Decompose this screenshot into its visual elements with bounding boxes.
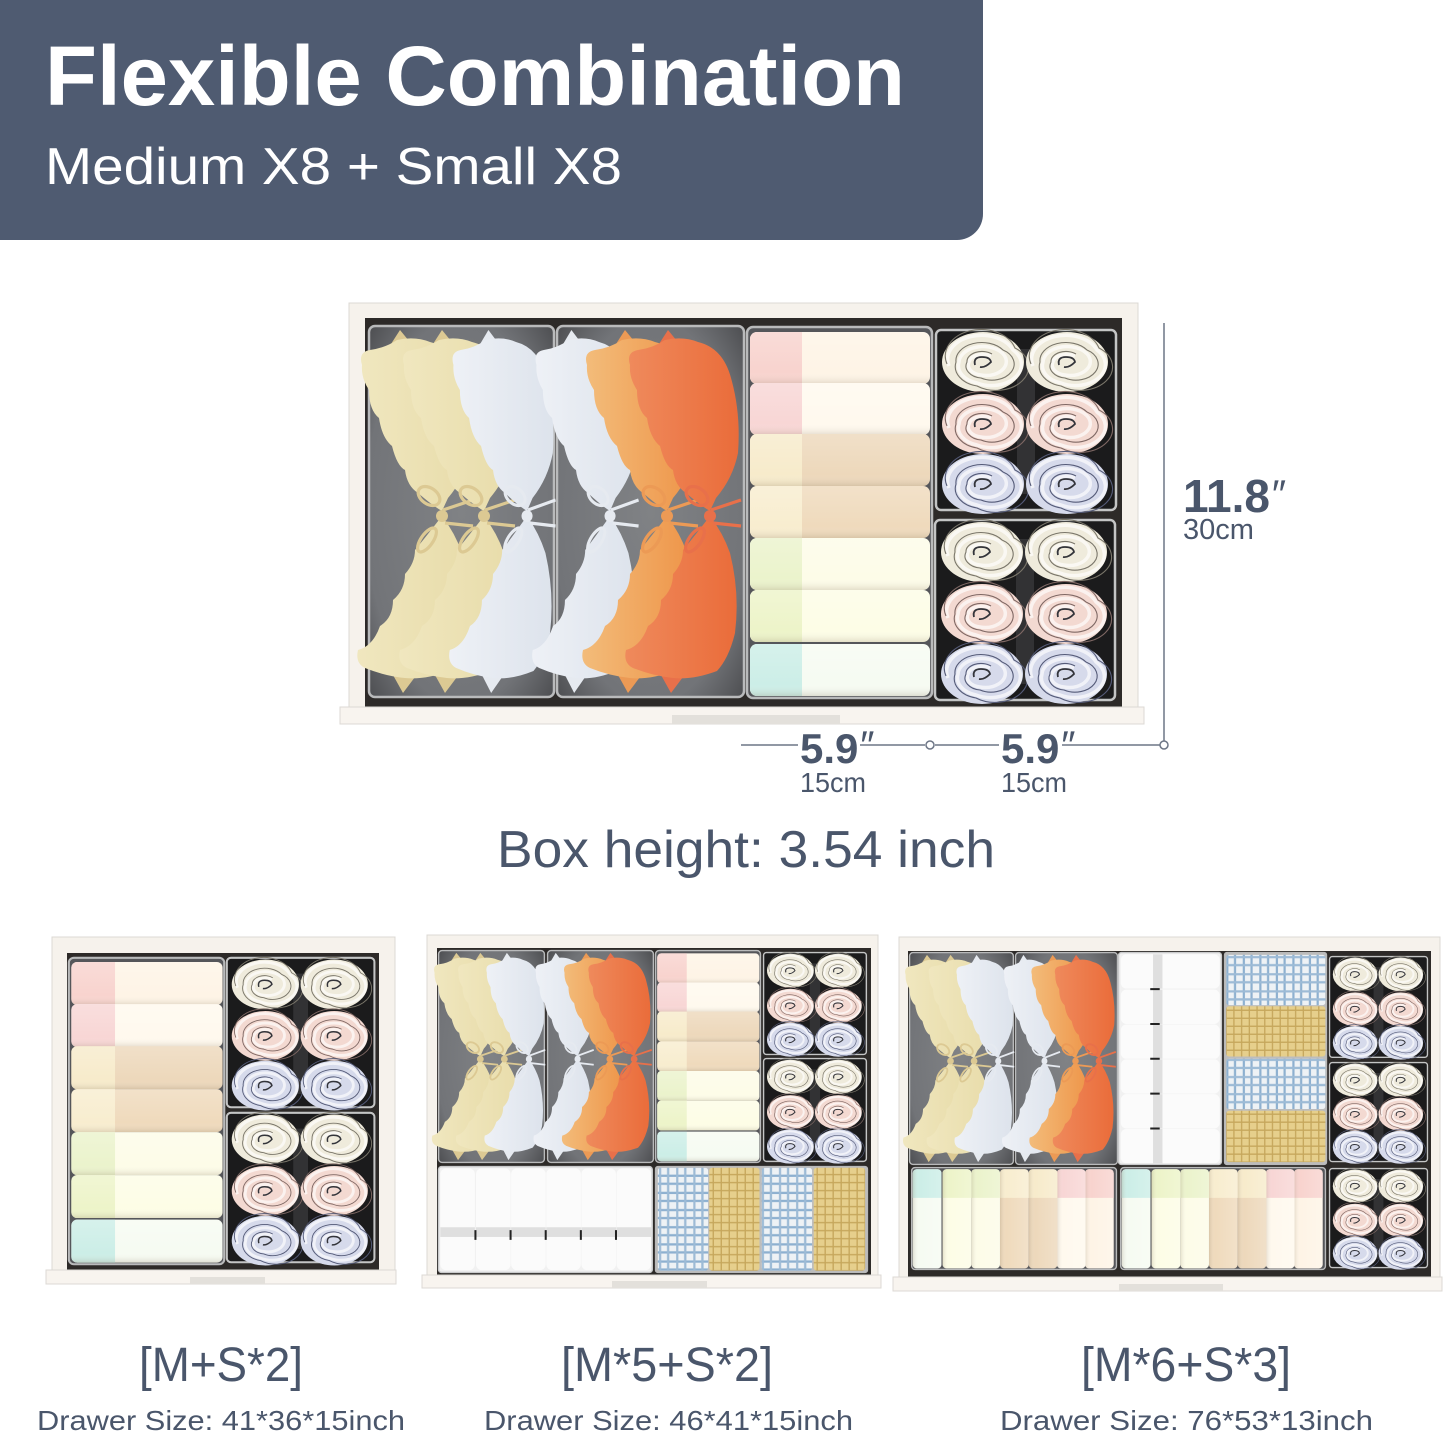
medium box: folded underwear (747, 327, 932, 698)
label: M*6+S*3 (1000, 1339, 1373, 1433)
dimension: width 5.9 inch right (935, 724, 1168, 798)
small box middle (1330, 1062, 1427, 1164)
vertical folded box 2 (1121, 1168, 1325, 1269)
medium box (69, 958, 224, 1264)
main drawer illustration (340, 303, 1144, 724)
drawer option: M*6+S*3 (893, 937, 1442, 1291)
label: M+S*2: [M+S*2] (139, 1339, 303, 1392)
small box top (1330, 956, 1427, 1060)
heading: Flexible Combination: Flexible Combination (45, 29, 905, 123)
dimension: width 5.9 inch left: 15cm (800, 767, 866, 798)
small box bottom (1330, 1168, 1427, 1270)
dimension: width 5.9 inch right: ″ (1059, 724, 1075, 768)
box height caption: Box height: 3.54 inch (497, 821, 995, 879)
label: M*5+S*2: [M*5+S*2] (561, 1339, 773, 1392)
small box bottom (227, 1112, 374, 1266)
dimension: height 11.8 inch: 11.8 (1183, 470, 1270, 522)
front rail (46, 1270, 396, 1284)
small box top (227, 957, 374, 1111)
dimension: width 5.9 inch left: ″ (858, 724, 874, 768)
bra box 2 (1002, 953, 1117, 1164)
drawer option: M*5+S*2 (422, 935, 881, 1288)
small box: rolled socks bottom (935, 520, 1115, 704)
plaid box (656, 1167, 867, 1272)
bra box 1 (903, 953, 1014, 1164)
dimension: width 5.9 inch left: 5.9 (800, 725, 858, 772)
dimension: height 11.8 inch: 30cm (1183, 514, 1254, 546)
towel box (439, 1167, 652, 1272)
white towels box (1119, 953, 1221, 1164)
front rail (422, 1275, 881, 1288)
small box top (764, 952, 866, 1057)
drawer option: M+S*2 (46, 937, 396, 1284)
drawer frame (349, 303, 1138, 723)
subheading: Medium X8 + Small X8: Medium X8 + Small X8 (45, 138, 622, 196)
title banner (0, 0, 983, 240)
vertical folded box 1 (912, 1168, 1116, 1269)
dimension: width 5.9 inch right: 15cm (1001, 767, 1067, 798)
folded box (656, 951, 760, 1162)
label: M+S*2 (37, 1339, 405, 1433)
small box: rolled socks top (936, 330, 1116, 514)
medium box: white and orange bras (532, 326, 744, 697)
dimension: width 5.9 inch left (741, 724, 934, 798)
dimension: width 5.9 inch right: 5.9 (1001, 725, 1059, 772)
front rail (893, 1277, 1442, 1291)
plaid box (1225, 953, 1326, 1164)
drawer front rail (340, 707, 1144, 724)
bra box 1 (432, 951, 545, 1162)
bra box 2 (533, 951, 653, 1162)
label: M*5+S*2 (484, 1339, 853, 1433)
dimension: height 11.8 inch: ″ (1270, 473, 1286, 517)
small box bottom (764, 1058, 866, 1164)
medium box: beige bras (357, 326, 556, 697)
dimension: height 11.8 inch (1164, 323, 1286, 742)
label: M*6+S*3: [M*6+S*3] (1081, 1339, 1291, 1392)
